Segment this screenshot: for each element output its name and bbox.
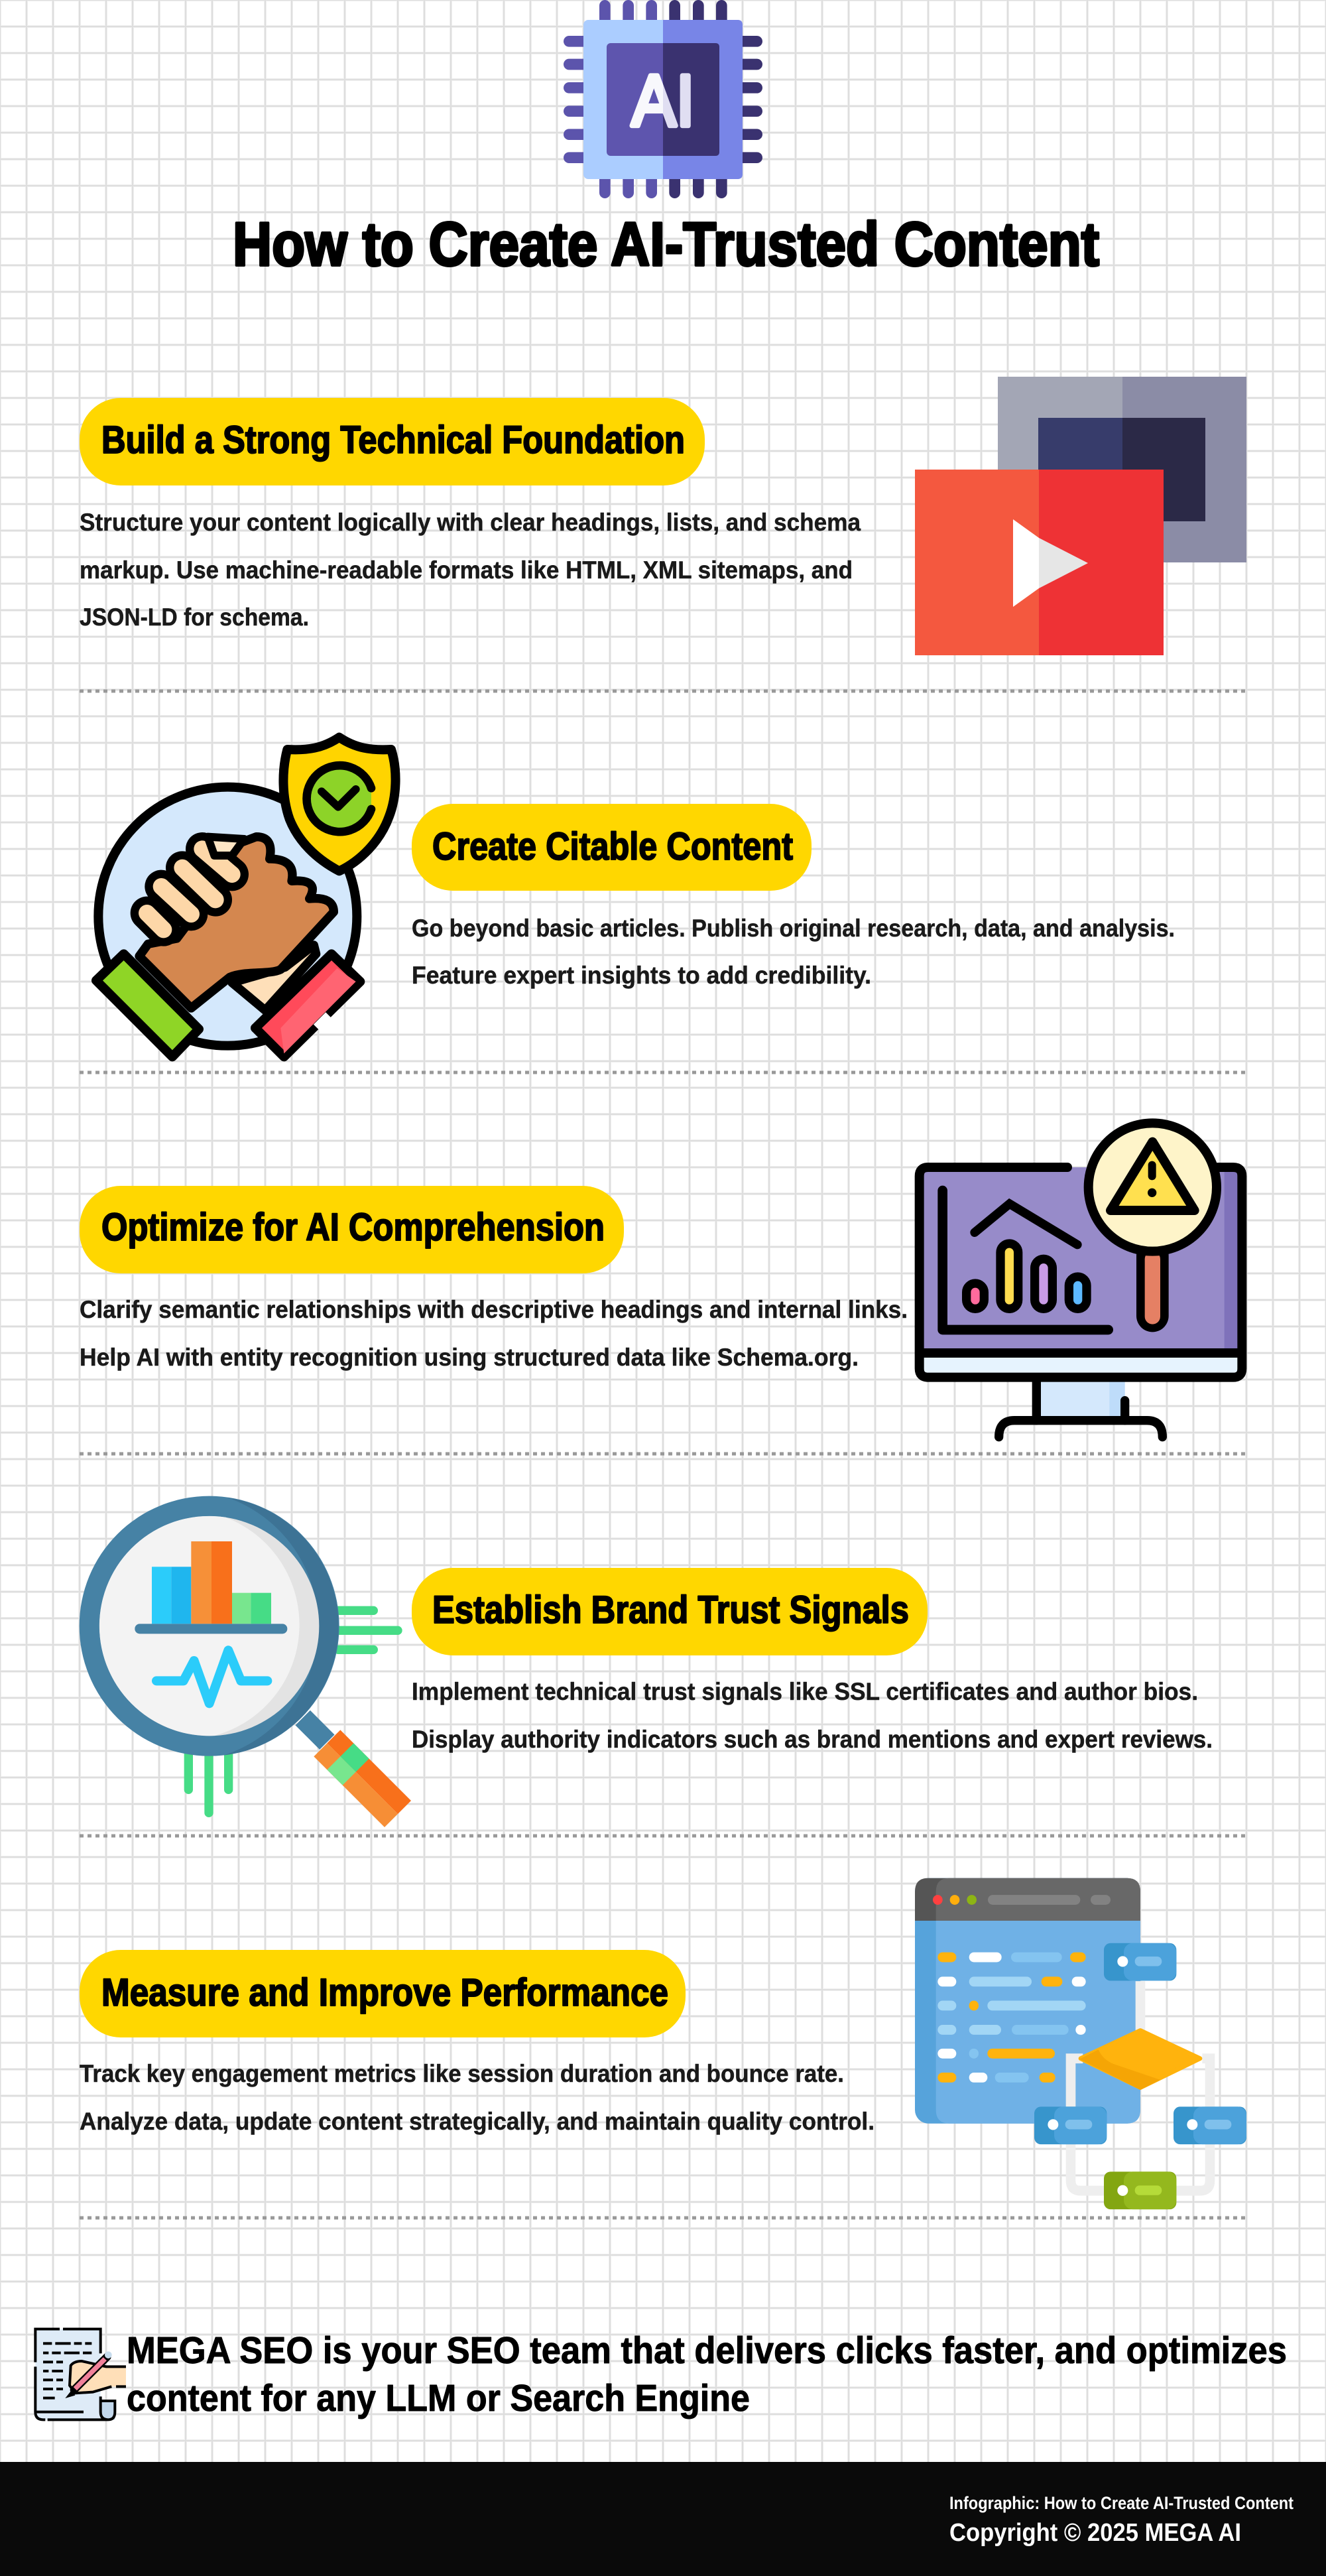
text block: Feature expert insights to add credibility. <box>412 962 871 989</box>
heading pill: Establish Brand Trust Signals <box>432 1588 909 1632</box>
icon: hand writing on document <box>34 2329 126 2419</box>
heading pill <box>80 1950 686 2037</box>
icon: video player <box>915 377 1246 655</box>
text block: markup. Use machine-readable formats like HTML, XML sitemaps, and <box>80 556 853 584</box>
text block: JSON-LD for schema. <box>80 604 309 631</box>
heading pill: Optimize for AI Comprehension <box>101 1206 605 1249</box>
call to action text: content for any LLM or Search Engine <box>127 2377 750 2419</box>
panel: establish brand trust signals <box>80 1496 1213 1827</box>
footer <box>0 2462 1326 2576</box>
icon: AI chip <box>569 5 757 193</box>
heading pill: Create Citable Content <box>432 825 793 868</box>
heading pill <box>412 1568 928 1655</box>
heading pill: Measure and Improve Performance <box>101 1971 668 2014</box>
panel: build a strong technical foundation <box>80 377 1246 655</box>
text block: Clarify semantic relationships with descriptive headings and internal links. <box>80 1296 908 1323</box>
text block <box>80 509 861 631</box>
text block <box>412 1678 1213 1753</box>
icon: magnifier with chart <box>80 1496 411 1827</box>
title: How to Create AI-Trusted Content <box>233 210 1099 279</box>
heading pill: Build a Strong Technical Foundation <box>101 419 685 462</box>
icon: AI chip: AI <box>632 60 695 141</box>
text block: Structure your content logically with clear headings, lists, and schema <box>80 509 861 536</box>
icon: monitor with warning magnifier <box>920 1123 1242 1437</box>
call to action <box>34 2329 1287 2419</box>
panel: measure and improve performance <box>80 1878 1246 2209</box>
copyright: Copyright © 2025 MEGA AI <box>949 2519 1241 2547</box>
heading pill <box>412 804 812 891</box>
text block <box>80 2060 874 2135</box>
text block: Go beyond basic articles. Publish original research, data, and analysis. <box>412 915 1175 942</box>
text block: Display authority indicators such as brand mentions and expert reviews. <box>412 1726 1213 1753</box>
text block: Help AI with entity recognition using structured data like Schema.org. <box>80 1344 859 1371</box>
text block: Track key engagement metrics like session duration and bounce rate. <box>80 2060 844 2087</box>
text block: Implement technical trust signals like SSL certificates and author bios. <box>412 1678 1198 1705</box>
text block <box>412 915 1175 989</box>
heading pill <box>80 398 705 485</box>
panel: optimize for AI comprehension <box>80 1123 1242 1437</box>
heading pill <box>80 1186 624 1273</box>
panel: create citable content <box>96 738 1175 1057</box>
icon: handshake with shield <box>96 738 396 1057</box>
text block: Analyze data, update content strategically, and maintain quality control. <box>80 2108 874 2135</box>
icon: code window with flowchart <box>915 1878 1246 2209</box>
text block <box>80 1296 908 1371</box>
call to action text <box>127 2329 1287 2419</box>
